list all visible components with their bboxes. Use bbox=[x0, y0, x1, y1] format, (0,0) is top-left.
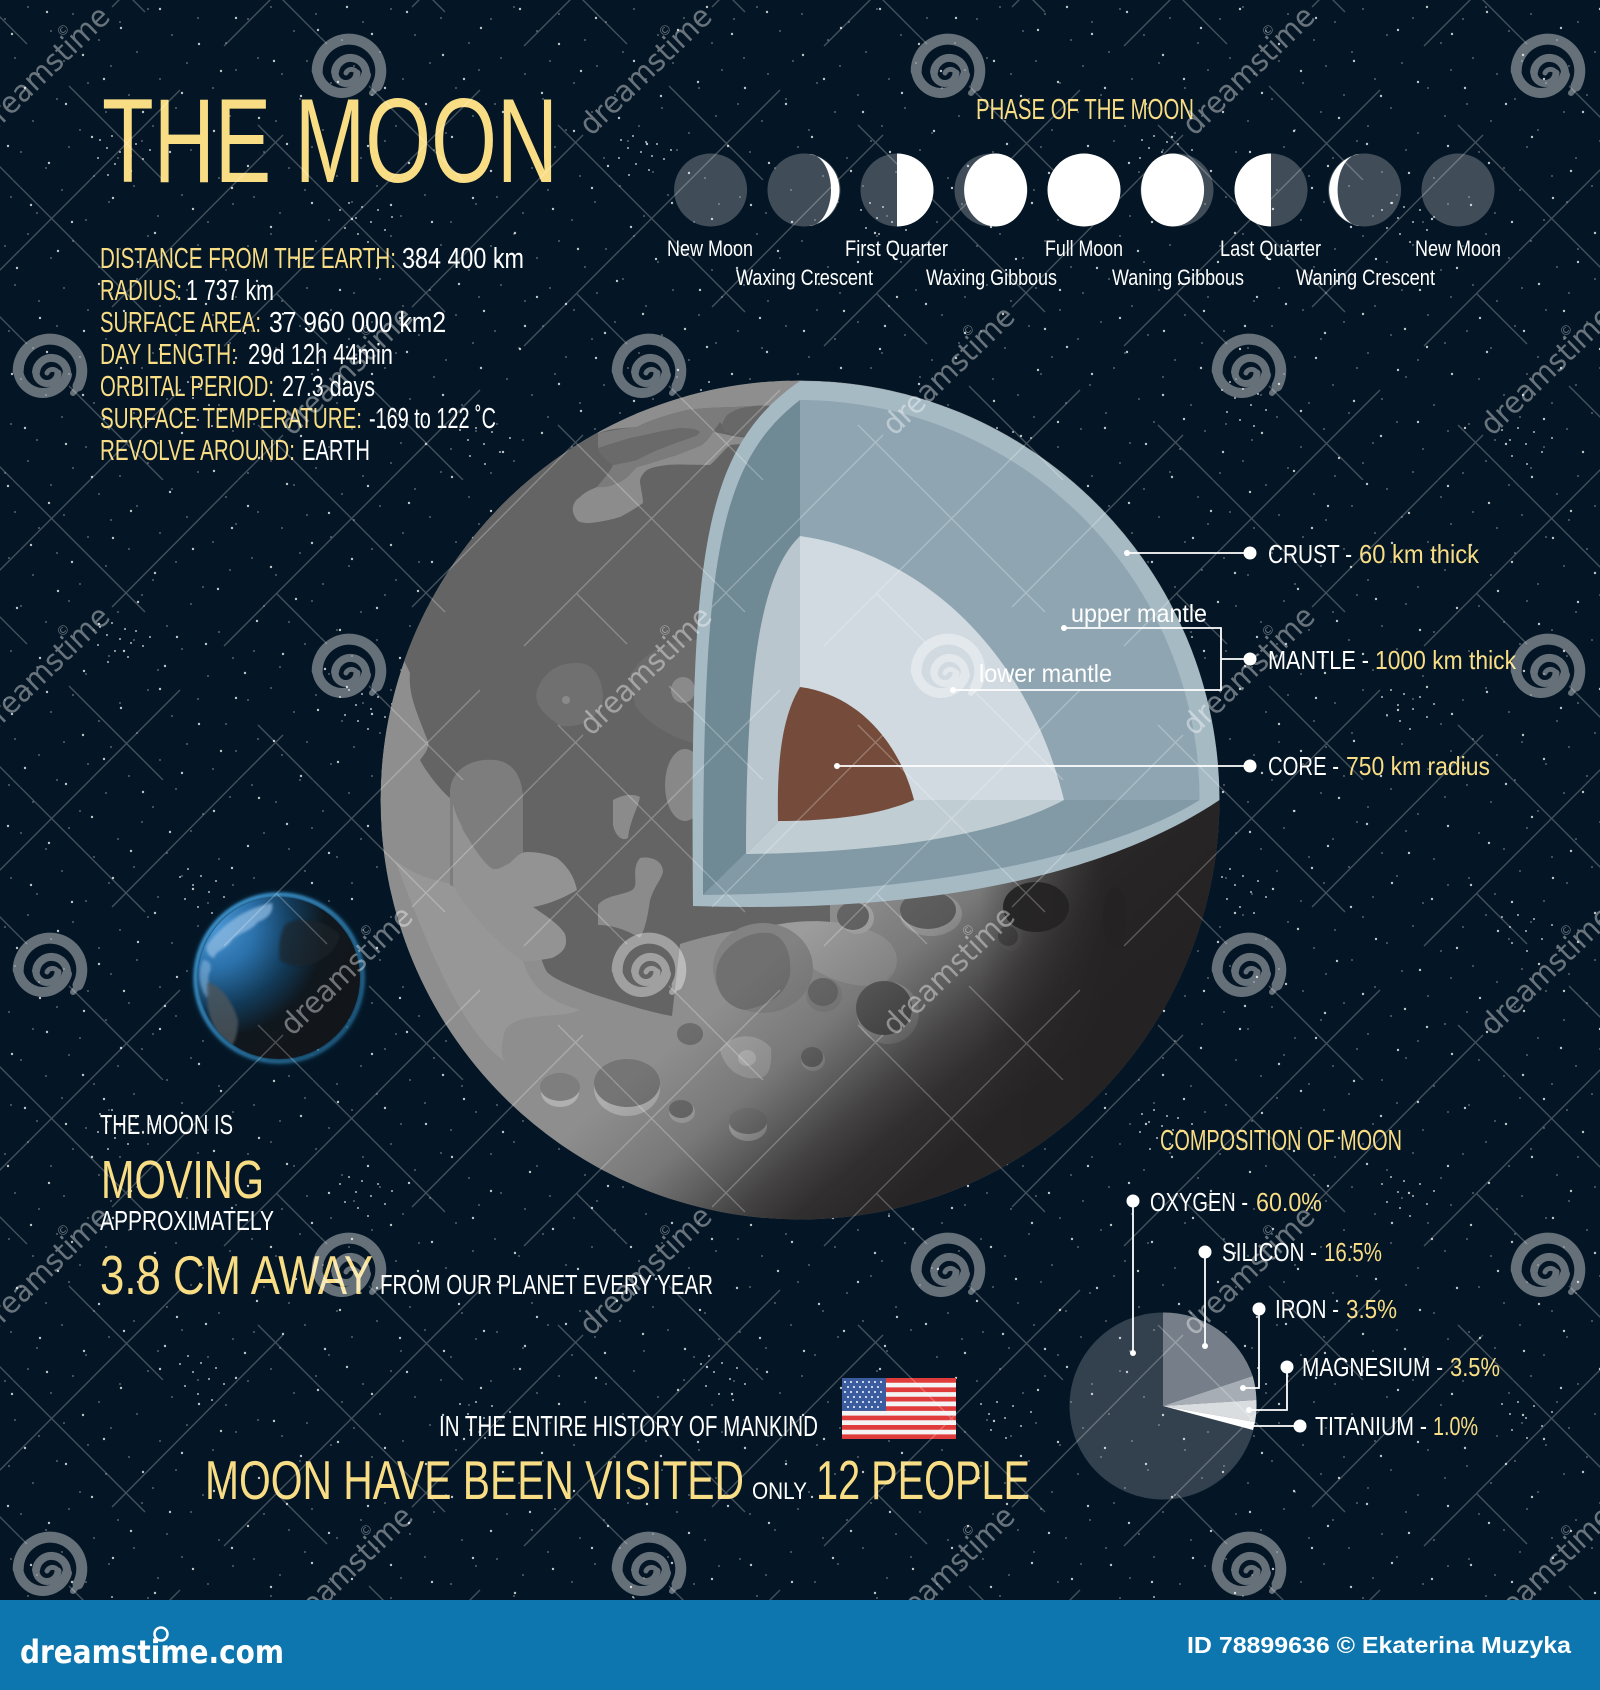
cutaway: lower mantle bottom face bbox=[746, 800, 1064, 854]
cutaway: upper mantle bottom face bbox=[703, 800, 1200, 895]
watermark overlay: dreamstime bbox=[1176, 599, 1322, 743]
phase labels: Waxing Crescent bbox=[736, 265, 873, 290]
phase labels: New Moon bbox=[667, 236, 753, 261]
phase labels: Full Moon bbox=[1045, 236, 1123, 261]
watermark overlay: © bbox=[1557, 921, 1577, 941]
callout: mantle: MANTLE - bbox=[1268, 645, 1369, 675]
watermark overlay: dreamstime bbox=[274, 899, 420, 1043]
callout: core: 750 km radius bbox=[1346, 751, 1490, 781]
text: only: ONLY bbox=[752, 1478, 807, 1505]
phase labels bbox=[667, 236, 1501, 290]
callout: iron: 3.5% bbox=[1346, 1294, 1397, 1324]
fact: surface temperature: SURFACE TEMPERATURE: bbox=[100, 403, 362, 435]
heading: phase of the moon: PHASE OF THE MOON bbox=[976, 94, 1194, 126]
cutaway: lower mantle right face bbox=[800, 536, 1064, 800]
cutaway: upper mantle right face bbox=[800, 400, 1200, 800]
panel: visitors fact bbox=[205, 1378, 1030, 1511]
cutaway: lower mantle left face bbox=[746, 536, 800, 854]
callout: titanium bbox=[1253, 1411, 1478, 1441]
watermark overlay: © bbox=[54, 1221, 74, 1241]
illustration: moon with cutaway bbox=[375, 375, 1220, 1220]
fact: day length: DAY LENGTH: bbox=[100, 339, 237, 371]
watermark overlay: dreamstime bbox=[876, 299, 1022, 443]
callout: iron: IRON - bbox=[1275, 1294, 1339, 1324]
text: 3.8 cm away: 3.8 CM AWAY bbox=[100, 1244, 373, 1306]
callout: mantle: lower mantle bbox=[979, 660, 1112, 688]
callout: silicon bbox=[1198, 1237, 1382, 1349]
text: the moon is: THE MOON IS bbox=[100, 1109, 233, 1140]
callout: iron bbox=[1240, 1294, 1397, 1391]
phase icons bbox=[674, 154, 1494, 226]
callout: mantle bbox=[950, 600, 1517, 693]
fact: radius: RADIUS: bbox=[100, 275, 182, 307]
callout: mantle: 1000 km thick bbox=[1375, 645, 1517, 675]
footer logo: dreamstime.com bbox=[20, 1633, 284, 1671]
callout: core: CORE - bbox=[1268, 751, 1339, 781]
panel: moving away fact bbox=[100, 1109, 713, 1306]
phase labels: Waning Crescent bbox=[1296, 265, 1435, 290]
callout: crust: CRUST - bbox=[1268, 539, 1352, 569]
text: moving: MOVING bbox=[101, 1150, 264, 1210]
fact: radius bbox=[100, 275, 274, 307]
phase labels: Waning Gibbous bbox=[1112, 265, 1244, 290]
watermark overlay: © bbox=[959, 921, 979, 941]
text: approximately: APPROXIMATELY bbox=[100, 1205, 274, 1236]
fact: distance: 384 400 km bbox=[402, 243, 524, 275]
watermark overlay: © bbox=[54, 621, 74, 641]
cutaway: crust bbox=[693, 381, 1220, 907]
panel: composition of moon bbox=[1070, 1125, 1500, 1500]
panel: structure callouts bbox=[834, 539, 1517, 781]
callout: mantle: upper mantle bbox=[1071, 600, 1207, 628]
fact: surface area bbox=[100, 307, 446, 339]
watermark overlay: dreamstime bbox=[1176, 1199, 1322, 1343]
callout: silicon: SILICON - bbox=[1222, 1237, 1317, 1267]
watermark overlay: © bbox=[1557, 321, 1577, 341]
fact: day length: 29d 12h 44min bbox=[248, 339, 393, 371]
callout: silicon: 16.5% bbox=[1324, 1237, 1382, 1267]
watermark overlay: © bbox=[959, 1521, 979, 1541]
watermark overlay: dreamstime bbox=[573, 1199, 719, 1343]
cutaway: core bbox=[778, 687, 914, 821]
fact: orbital period: 27.3 days bbox=[282, 371, 375, 403]
panel: phases of the moon bbox=[667, 94, 1501, 290]
fact: surface area: 37 960 000 km2 bbox=[269, 307, 446, 339]
fact: day length bbox=[100, 339, 393, 371]
phase labels: Last Quarter bbox=[1220, 236, 1321, 261]
watermark overlay: © bbox=[656, 1221, 676, 1241]
callout: crust bbox=[1124, 539, 1480, 569]
phase labels: New Moon bbox=[1415, 236, 1501, 261]
text: moon have been visited: MOON HAVE BEEN VISITED bbox=[205, 1449, 744, 1511]
watermark overlay: © bbox=[1557, 1521, 1577, 1541]
callout: titanium: TITANIUM - bbox=[1315, 1411, 1427, 1441]
footer credit: ID 78899636 © Ekaterina Muzyka bbox=[1187, 1632, 1571, 1658]
phase labels: Waxing Gibbous bbox=[926, 265, 1057, 290]
panel: moon facts bbox=[100, 243, 524, 467]
watermark overlay: © bbox=[54, 21, 74, 41]
callout: oxygen: OXYGEN - bbox=[1150, 1187, 1248, 1217]
watermark overlay: © bbox=[1259, 621, 1279, 641]
footer banner bbox=[0, 1600, 1600, 1690]
watermark overlay: © bbox=[959, 321, 979, 341]
watermark overlay: © bbox=[357, 921, 377, 941]
fact: orbital period: ORBITAL PERIOD: bbox=[100, 371, 274, 403]
callout: oxygen bbox=[1126, 1187, 1322, 1356]
watermark overlay: dreamstime bbox=[274, 1499, 420, 1643]
fact: distance: DISTANCE FROM THE EARTH: bbox=[100, 243, 396, 275]
title: THE MOON bbox=[102, 74, 558, 208]
callout: titanium: 1.0% bbox=[1433, 1411, 1478, 1441]
watermark overlay: © bbox=[357, 1521, 377, 1541]
callout: magnesium: MAGNESIUM - bbox=[1302, 1352, 1443, 1382]
text: from our planet every year: FROM OUR PLANET EVERY YEAR bbox=[380, 1269, 713, 1300]
watermark overlay: dreamstime bbox=[573, 599, 719, 743]
callout: magnesium: 3.5% bbox=[1450, 1352, 1500, 1382]
fact: surface area: SURFACE AREA: bbox=[100, 307, 261, 339]
moon surface bbox=[375, 375, 1220, 1220]
watermark overlay: © bbox=[656, 21, 676, 41]
watermark overlay: dreamstime bbox=[274, 299, 420, 443]
text: 12 people: 12 PEOPLE bbox=[816, 1449, 1030, 1511]
watermark overlay: © bbox=[656, 621, 676, 641]
callout: magnesium bbox=[1246, 1352, 1500, 1413]
icon: usa flag bbox=[842, 1378, 956, 1439]
heading: composition of moon: COMPOSITION OF MOON bbox=[1160, 1125, 1402, 1157]
callout: oxygen: 60.0% bbox=[1256, 1187, 1322, 1217]
fact: revolve around: EARTH bbox=[302, 435, 370, 467]
text: in the entire history of mankind: IN THE ENTIRE HISTORY OF MANKIND bbox=[439, 1411, 818, 1443]
fact: revolve around: REVOLVE AROUND: bbox=[100, 435, 295, 467]
pie chart bbox=[1070, 1312, 1257, 1500]
cutaway: upper mantle left face bbox=[703, 400, 800, 895]
watermark overlay: © bbox=[1259, 1221, 1279, 1241]
fact: surface temperature: -169 to 122 ˚C bbox=[369, 403, 496, 435]
phase labels: First Quarter bbox=[845, 236, 948, 261]
callout: core bbox=[834, 751, 1490, 781]
watermark overlay: © bbox=[357, 321, 377, 341]
fact: radius: 1 737 km bbox=[186, 275, 274, 307]
callout: crust: 60 km thick bbox=[1359, 539, 1480, 569]
watermark overlay: dreamstime bbox=[876, 1499, 1022, 1643]
watermark overlay: dreamstime bbox=[876, 899, 1022, 1043]
icon: earth bbox=[193, 892, 365, 1064]
watermark overlay: © bbox=[1259, 21, 1279, 41]
